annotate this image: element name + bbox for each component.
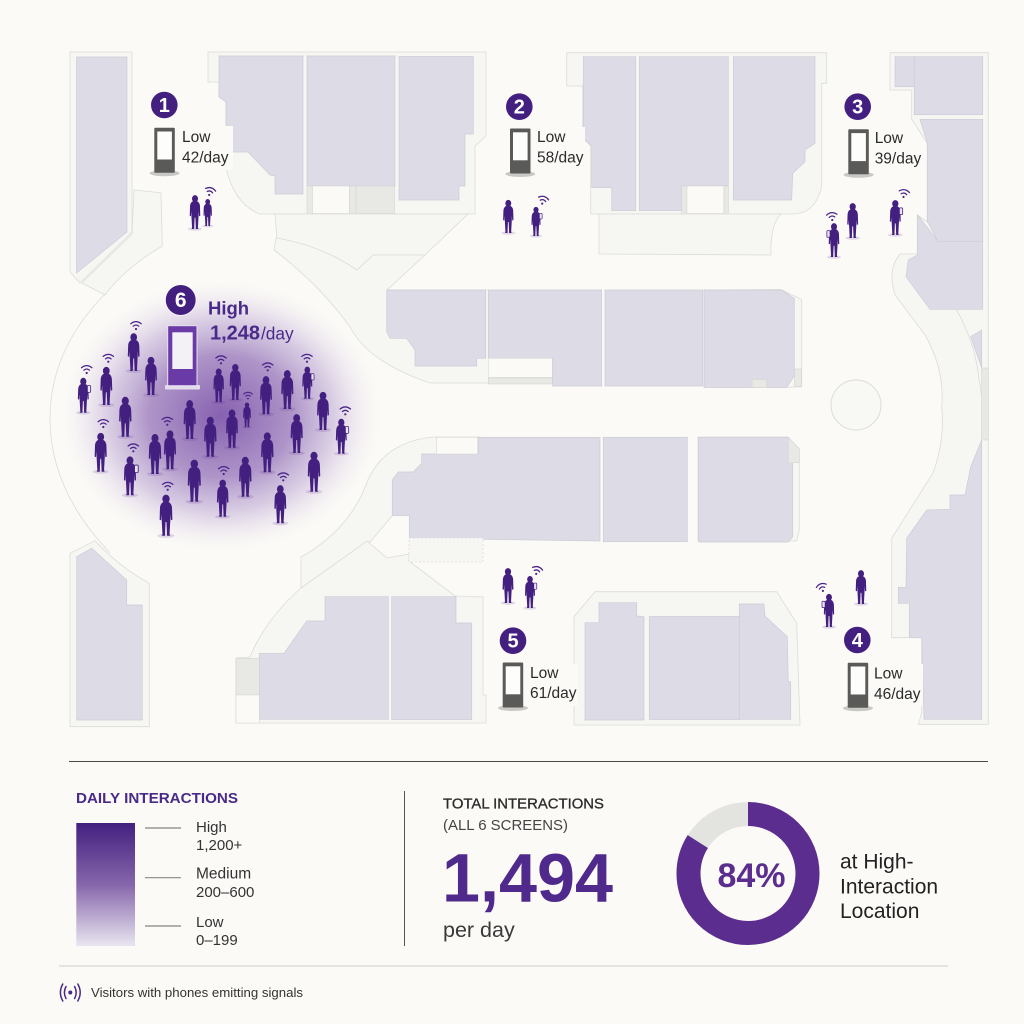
legend title: DAILY INTERACTIONS bbox=[76, 791, 238, 807]
total interactions stat bbox=[442, 797, 613, 942]
screen 5: 5 bbox=[507, 631, 519, 653]
label high 1,248/day bbox=[208, 298, 294, 344]
central top block bbox=[387, 290, 802, 388]
upper curved walkway bbox=[275, 214, 468, 270]
legend tier high bbox=[145, 819, 243, 854]
legend tier low bbox=[145, 914, 238, 949]
total interactions stat: 1,494 bbox=[442, 840, 613, 916]
visitors at screen 2 bbox=[501, 195, 549, 238]
screen 2: Low bbox=[537, 129, 566, 146]
plaza approach walkway bbox=[274, 238, 490, 383]
lower-left store bbox=[70, 541, 149, 727]
visitors at screen 5 bbox=[501, 565, 543, 610]
number badge 6: 6 bbox=[175, 289, 187, 312]
screen 1 bbox=[150, 92, 233, 176]
donut caption: at High- bbox=[840, 850, 914, 874]
legend tier medium: Medium bbox=[196, 866, 251, 882]
lower curved walkway bbox=[301, 437, 480, 588]
screen 1: 42/day bbox=[182, 150, 229, 166]
screen 3: Low bbox=[875, 130, 904, 147]
donut caption: Interaction bbox=[840, 876, 938, 898]
bottom divider bbox=[59, 965, 948, 967]
band under top second block bbox=[599, 214, 781, 255]
total interactions stat: (ALL 6 SCREENS) bbox=[443, 818, 568, 834]
screen 4: 46/day bbox=[874, 686, 921, 703]
visitors at screen 4 bbox=[816, 570, 868, 629]
screen 2: 58/day bbox=[537, 150, 584, 166]
plaza outline bbox=[50, 294, 110, 553]
gradient bar bbox=[76, 823, 135, 946]
floor plan bbox=[50, 52, 988, 727]
donut chart 84%: 84% bbox=[717, 857, 786, 895]
top divider bbox=[69, 760, 988, 762]
right wing bbox=[890, 53, 988, 724]
bottom centre block bbox=[574, 592, 800, 725]
label high 1,248/day: High bbox=[208, 298, 249, 319]
donut caption bbox=[840, 850, 938, 923]
signal note: Visitors with phones emitting signals bbox=[91, 986, 303, 1000]
legend tier high: 1,200+ bbox=[196, 837, 243, 854]
crowd at screen 6 bbox=[76, 322, 350, 538]
screen 6: high traffic bbox=[165, 284, 294, 390]
screen 5 bbox=[498, 627, 578, 711]
top second block bbox=[567, 53, 827, 214]
screen 5: Low bbox=[530, 665, 559, 682]
kiosk 6 bbox=[165, 326, 200, 390]
central round fountain bbox=[831, 380, 881, 430]
legend tier high: High bbox=[196, 819, 227, 836]
screen 3: 3 bbox=[852, 97, 863, 119]
screen 2: 2 bbox=[514, 97, 525, 119]
donut caption: Location bbox=[840, 900, 919, 923]
screen 3 bbox=[844, 93, 921, 178]
vertical divider bbox=[404, 791, 406, 946]
label high 1,248/day: 1,248 bbox=[210, 322, 260, 344]
icon: signal bbox=[60, 984, 80, 1001]
top block A bbox=[208, 52, 486, 214]
total interactions stat: TOTAL INTERACTIONS bbox=[443, 797, 604, 813]
top-left store bbox=[70, 52, 132, 283]
screen 1: Low bbox=[182, 129, 211, 146]
screen 5: 61/day bbox=[530, 685, 577, 702]
legend tier medium bbox=[145, 866, 254, 901]
donut chart 84% bbox=[688, 814, 808, 933]
screen 4: 4 bbox=[852, 630, 864, 652]
label high 1,248/day: /day bbox=[261, 323, 294, 343]
legend tier low: 0–199 bbox=[196, 932, 238, 949]
total interactions stat: per day bbox=[443, 918, 515, 942]
legend: daily interactions bbox=[76, 791, 254, 949]
visitors at screen 3 bbox=[826, 189, 910, 259]
central bottom block bbox=[392, 437, 799, 542]
screen 1: 1 bbox=[159, 95, 170, 117]
screen 2 bbox=[505, 93, 585, 177]
legend tier low: Low bbox=[196, 914, 224, 931]
lower-left block bbox=[236, 538, 486, 723]
top-left walkway bbox=[82, 190, 162, 295]
screen 4: Low bbox=[874, 666, 903, 682]
heat map around screen 6 bbox=[61, 280, 381, 552]
screen 4 bbox=[843, 627, 923, 711]
legend tier medium: 200–600 bbox=[196, 884, 254, 901]
visitors at screen 1 bbox=[188, 186, 216, 231]
screen 3: 39/day bbox=[875, 150, 921, 168]
